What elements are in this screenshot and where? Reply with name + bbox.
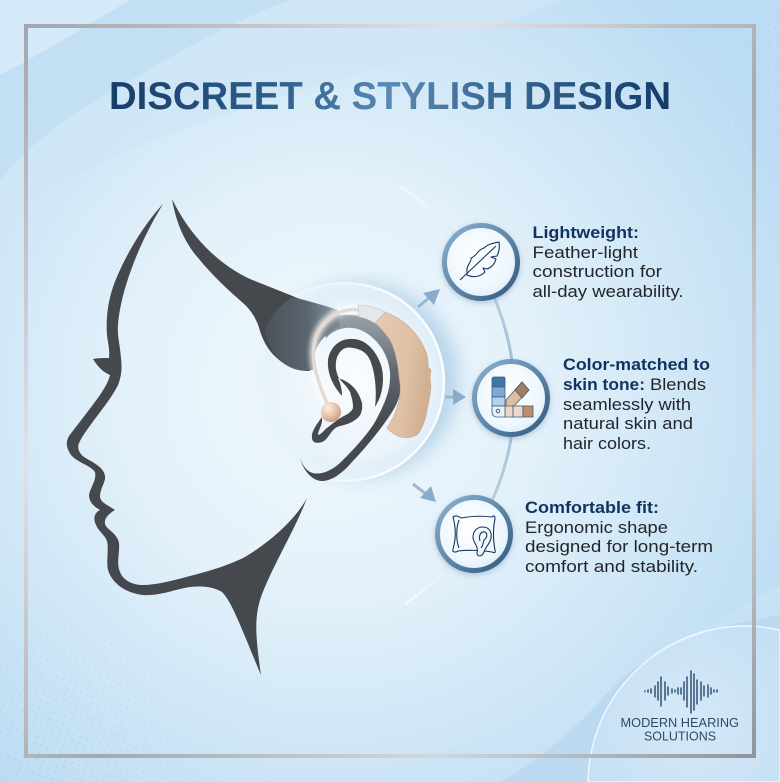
dome tip [321, 402, 341, 422]
icon: pillow with ear [438, 498, 510, 570]
text block: color-matched [563, 356, 710, 453]
text block: lightweight [532, 224, 684, 301]
text block: lightweight: all-day wearability. [532, 283, 684, 301]
arrow to lightweight [418, 289, 440, 307]
text block: lightweight: construction for [532, 263, 663, 281]
text block: color-matched: natural skin and [563, 415, 693, 433]
title: DISCREET & STYLISH DESIGN [109, 75, 671, 118]
brand name: MODERN HEARING [620, 715, 739, 730]
outer ear helix [300, 315, 402, 481]
text block: lightweight: Lightweight: [532, 224, 639, 242]
text block: color-matched: skin tone: [563, 376, 645, 394]
tube glow [313, 309, 359, 403]
text block: comfortable fit: Ergonomic shape [525, 519, 668, 537]
hair inside lens [265, 297, 340, 370]
face outline [67, 204, 307, 675]
icon: sound wave [645, 671, 717, 713]
ear outline [300, 315, 402, 481]
icon: color swatches [474, 362, 548, 434]
arrow to comfort [413, 484, 436, 502]
clear connector [358, 305, 385, 323]
hearing aid [313, 305, 431, 438]
text block: color-matched: Color-matched to [563, 356, 710, 374]
text block: comfortable fit: Comfortable fit: [525, 499, 659, 517]
text block: comfortable fit: comfort and stability. [525, 558, 698, 576]
text block: comfortable fit [525, 499, 713, 576]
clear tube [313, 310, 359, 403]
icon: feather [444, 226, 518, 298]
text block: color-matched: hair colors. [563, 435, 651, 453]
face profile [67, 199, 340, 675]
lens glow [266, 284, 458, 476]
text block: comfortable fit: designed for long-term [525, 538, 713, 556]
beige body [375, 312, 431, 438]
text block: color-matched: seamlessly with [563, 396, 691, 414]
logo [620, 671, 739, 744]
text block: lightweight: Feather-light [532, 244, 638, 262]
inner ear [312, 339, 383, 443]
connecting arc [400, 186, 515, 604]
hair sweep [172, 199, 314, 371]
logo badge glass circle [588, 626, 780, 782]
text block: color-matched: Blends [650, 376, 706, 394]
logo: SOLUTIONS [644, 728, 716, 744]
arrow to color match [445, 389, 466, 405]
lens circle [246, 283, 444, 481]
